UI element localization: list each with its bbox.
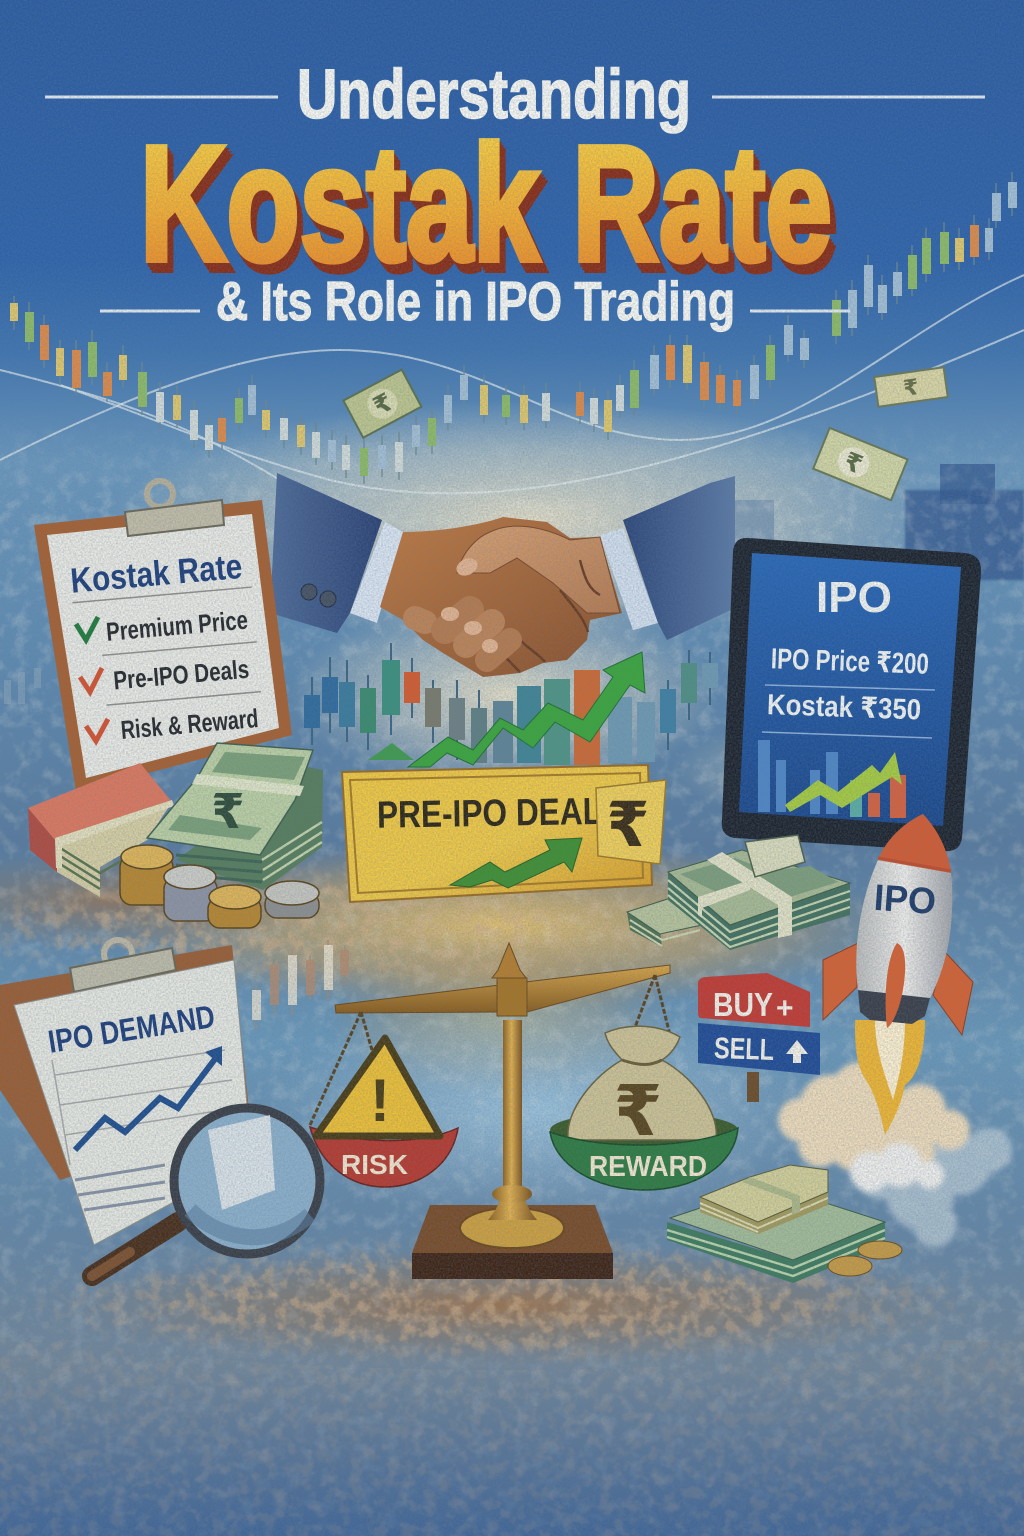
floating banknote top center: ₹ [369,388,397,421]
clipboard paper [47,514,279,778]
finger nails [441,555,498,653]
tablet bar chart [758,740,906,818]
scale base [412,1205,613,1253]
sticky note rupee [596,780,666,864]
reward bowl inner [550,1112,738,1148]
loose note [745,835,805,877]
green banknote stack back [176,765,323,890]
rocket [823,814,973,1035]
sell sign: SELL [713,1032,775,1067]
warning triangle [316,1038,440,1136]
mini line chart [52,1046,236,1210]
rocket label: IPO [873,877,937,922]
green note band [192,774,304,796]
check marks [76,617,98,640]
right hand and thumb [457,526,620,613]
panel: Kostak Rate clipboard [34,481,292,792]
tablet screen [739,553,961,826]
scale finial [492,943,526,978]
money stacks and coins left: ₹ [211,786,245,839]
background small candles behind scale [252,940,349,1030]
reward pan: ₹ [614,1072,662,1150]
rocket flame [855,1020,925,1135]
risk pan: ! [370,1067,390,1134]
right shirt cuff [600,528,658,630]
money stack bottom right [667,1165,902,1283]
floating banknote top right [874,367,948,407]
floating banknote right: ₹ [840,447,866,480]
ticket: Pre-IPO deal [342,765,666,902]
balance scale [310,943,670,1279]
left suit sleeve [270,473,382,633]
small stack [627,895,705,947]
left and right chains [310,975,670,1125]
ticket green arrow [450,838,582,888]
red banknote stack [28,808,57,872]
reward pan [550,1026,738,1190]
risk bowl [310,1127,458,1187]
upper stack sides [700,1192,828,1234]
magnifying glass [92,1108,320,1276]
reward pan: REWARD [589,1151,707,1183]
rocket nozzle [858,990,930,1024]
money stacks and coins left [28,743,323,928]
clipboard text: Pre-IPO Deals [112,654,250,695]
clipboard text [69,546,265,748]
rocket right fin [933,952,973,1035]
risk pan [310,1038,458,1187]
tablet text [767,573,929,726]
title decorative rule left [45,97,278,311]
left hand [380,517,622,677]
upper stack top [700,1165,828,1222]
clipboard board [34,500,292,792]
bottom stack sides [667,1222,885,1283]
bottom stack top [670,1185,885,1260]
tablet text: IPO [816,573,892,622]
knuckles [495,560,600,672]
main stack sides [668,872,850,950]
title line 3: & Its Role in IPO Trading [216,270,735,332]
green banknote top [147,743,313,855]
clipboard text: Kostak Rate [69,547,244,601]
buy sign: BUY [713,986,773,1023]
money stack right [627,835,850,950]
green growth arrow [408,652,645,767]
money bag [568,1026,716,1140]
risk pan: RISK [341,1149,408,1180]
rocket left fin [823,943,858,1020]
clipboard text: Risk & Reward [119,703,260,745]
clipboard text: Premium Price [105,605,249,647]
heading text: IPO DEMAND [46,998,217,1060]
main stack top [668,850,850,925]
tablet body [722,538,981,851]
scale beam [335,965,670,1013]
floating banknote right [813,428,908,500]
rocket nose cone [878,814,951,873]
rocket center fin [886,943,905,1028]
jacket buttons [301,584,336,607]
rocket body [856,860,952,998]
rocket smoke [778,1062,1012,1247]
scale pole [503,1020,522,1188]
cream banknote stack [57,802,172,897]
buy sell signpost [698,973,820,1102]
clipboard metal clip [125,481,224,536]
coins [858,1241,902,1259]
left shirt cuff [350,522,403,623]
clip [70,940,176,992]
sticky note rupee: ₹ [606,791,650,860]
floating banknote top right: ₹ [902,374,920,401]
candlestick chart background [4,172,1017,704]
fingers [415,610,510,660]
title decorative rule right [712,97,985,311]
board [0,945,250,1180]
floating banknote top center [343,370,421,438]
title [45,55,985,332]
center candlestick chart [304,643,718,765]
paper band [698,852,792,938]
buy sign [698,973,810,1027]
ticket text: PRE-IPO DEAL [377,791,602,837]
tablet [722,538,981,851]
curved trend lines [0,275,1024,493]
tablet text: IPO Price ₹200 [770,643,929,681]
panel: IPO demand clipboard [0,940,252,1245]
coin piles [120,845,319,928]
right suit sleeve [623,476,735,640]
handshake [270,473,735,677]
tablet text: Kostak ₹350 [767,689,922,726]
title line 1: Understanding [297,55,691,133]
reward bowl [550,1128,738,1190]
buy sign: + [776,992,794,1025]
paper [14,960,252,1245]
